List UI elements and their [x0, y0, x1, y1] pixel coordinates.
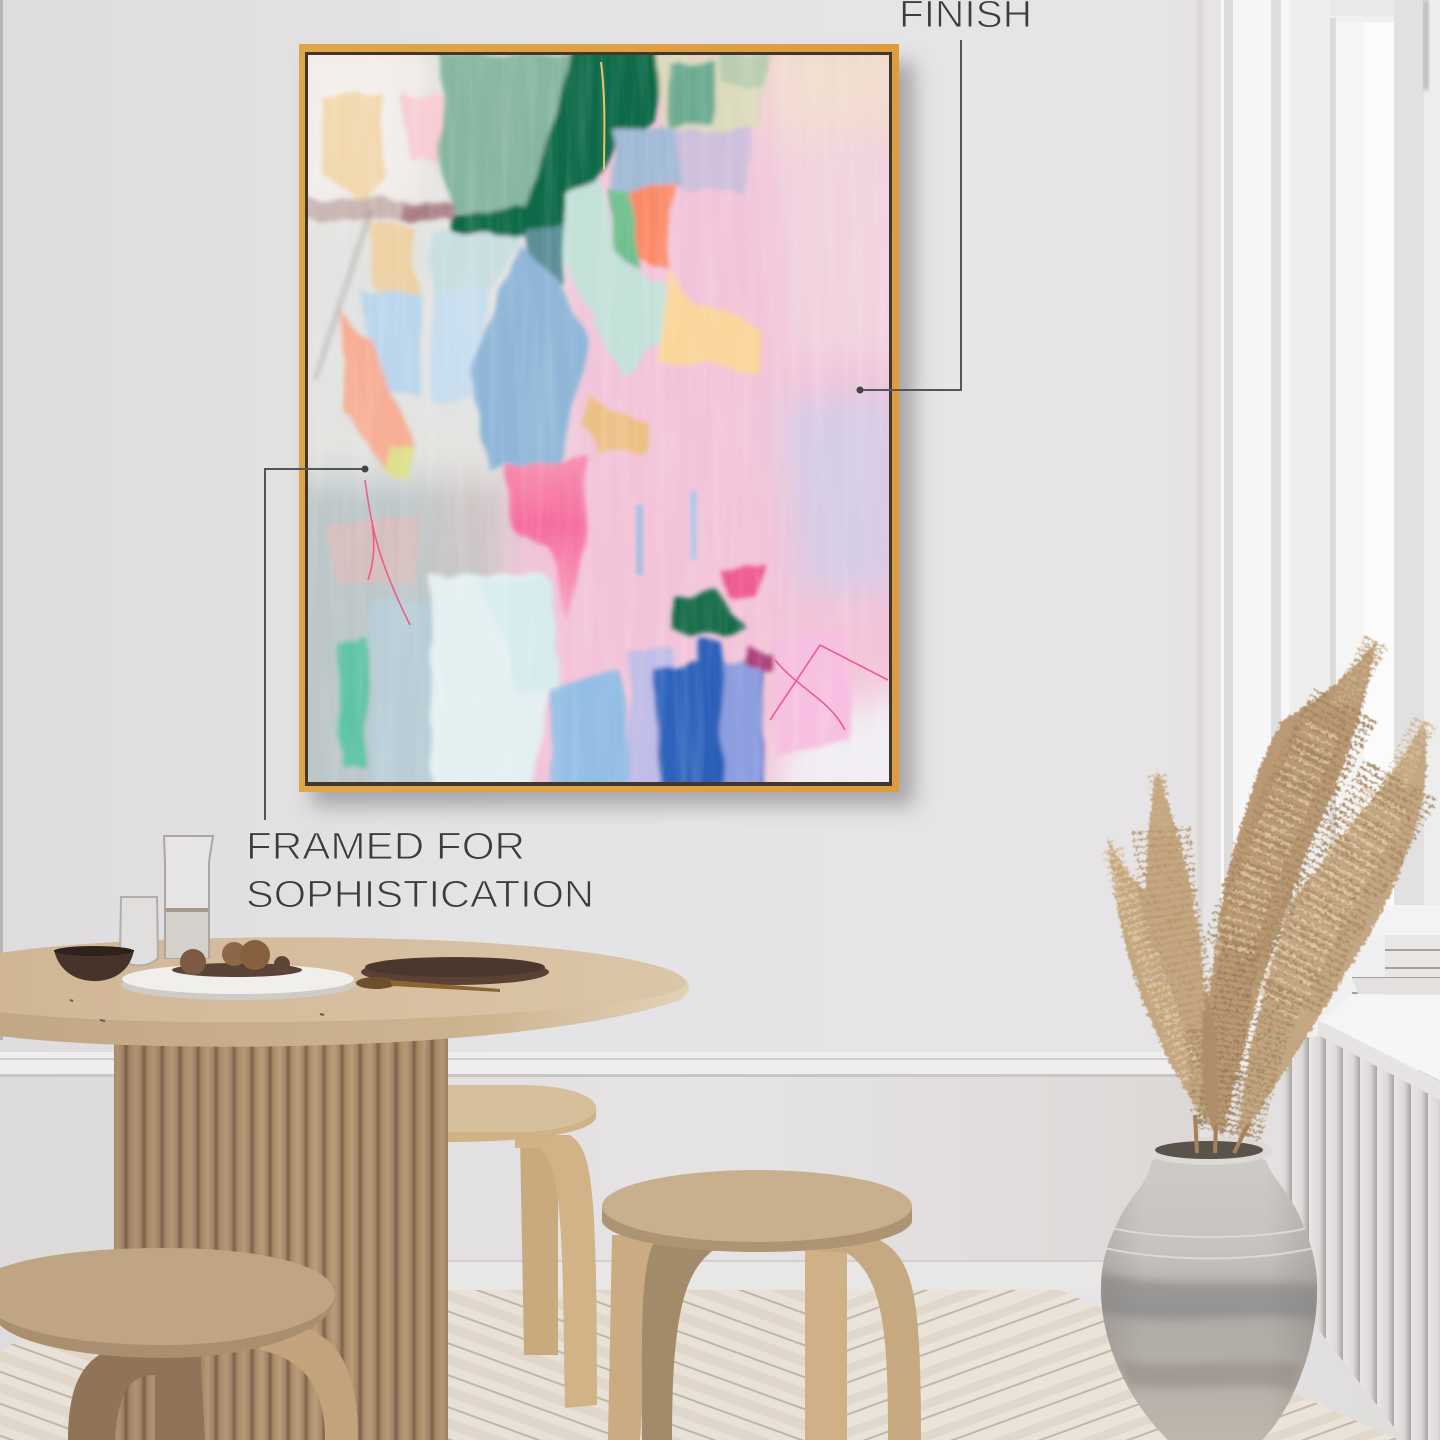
plume left: [1108, 770, 1208, 1125]
glass carafe: [164, 836, 213, 958]
brush strokes: [308, 40, 850, 790]
right stool: [602, 1170, 921, 1440]
round table top: [0, 937, 689, 1047]
stack of books: [1385, 935, 1440, 995]
ceramic vase: [1095, 1115, 1325, 1440]
fluted table base: [114, 1035, 448, 1440]
framed painting: [270, 20, 930, 820]
herringbone floor: [0, 1290, 1400, 1440]
radiator: [1280, 1036, 1440, 1440]
fine pink and gold lines: [365, 480, 888, 730]
callout line: frame: [265, 466, 368, 820]
drinking glass: [120, 897, 158, 966]
dark bowl: [54, 946, 134, 981]
callout text: framed for sophistication: FRAMED FOR: [246, 826, 525, 868]
small centre tuft: [1202, 985, 1219, 1135]
blended ground colours: [308, 55, 889, 782]
marble tray with nuts: [121, 940, 355, 1000]
plume right: [1238, 720, 1427, 1145]
brush streak texture: [332, 55, 763, 782]
back stool: [444, 1085, 597, 1408]
window sill: [1320, 995, 1440, 1080]
callout line: finish: [856, 40, 961, 394]
plume center: [1206, 640, 1376, 1135]
pampas grass: [1108, 640, 1427, 1145]
abstract artwork: [308, 55, 889, 782]
callout text: framed for sophistication: SOPHISTICATION: [246, 874, 594, 916]
dark plate and spoon: [356, 957, 549, 992]
stems: [1195, 1115, 1248, 1153]
vase rim: [1146, 1137, 1272, 1165]
gold frame: [299, 44, 899, 792]
window and trim: [1197, 0, 1440, 1440]
front stool: [0, 1248, 358, 1440]
glass reflection: [312, 208, 374, 380]
